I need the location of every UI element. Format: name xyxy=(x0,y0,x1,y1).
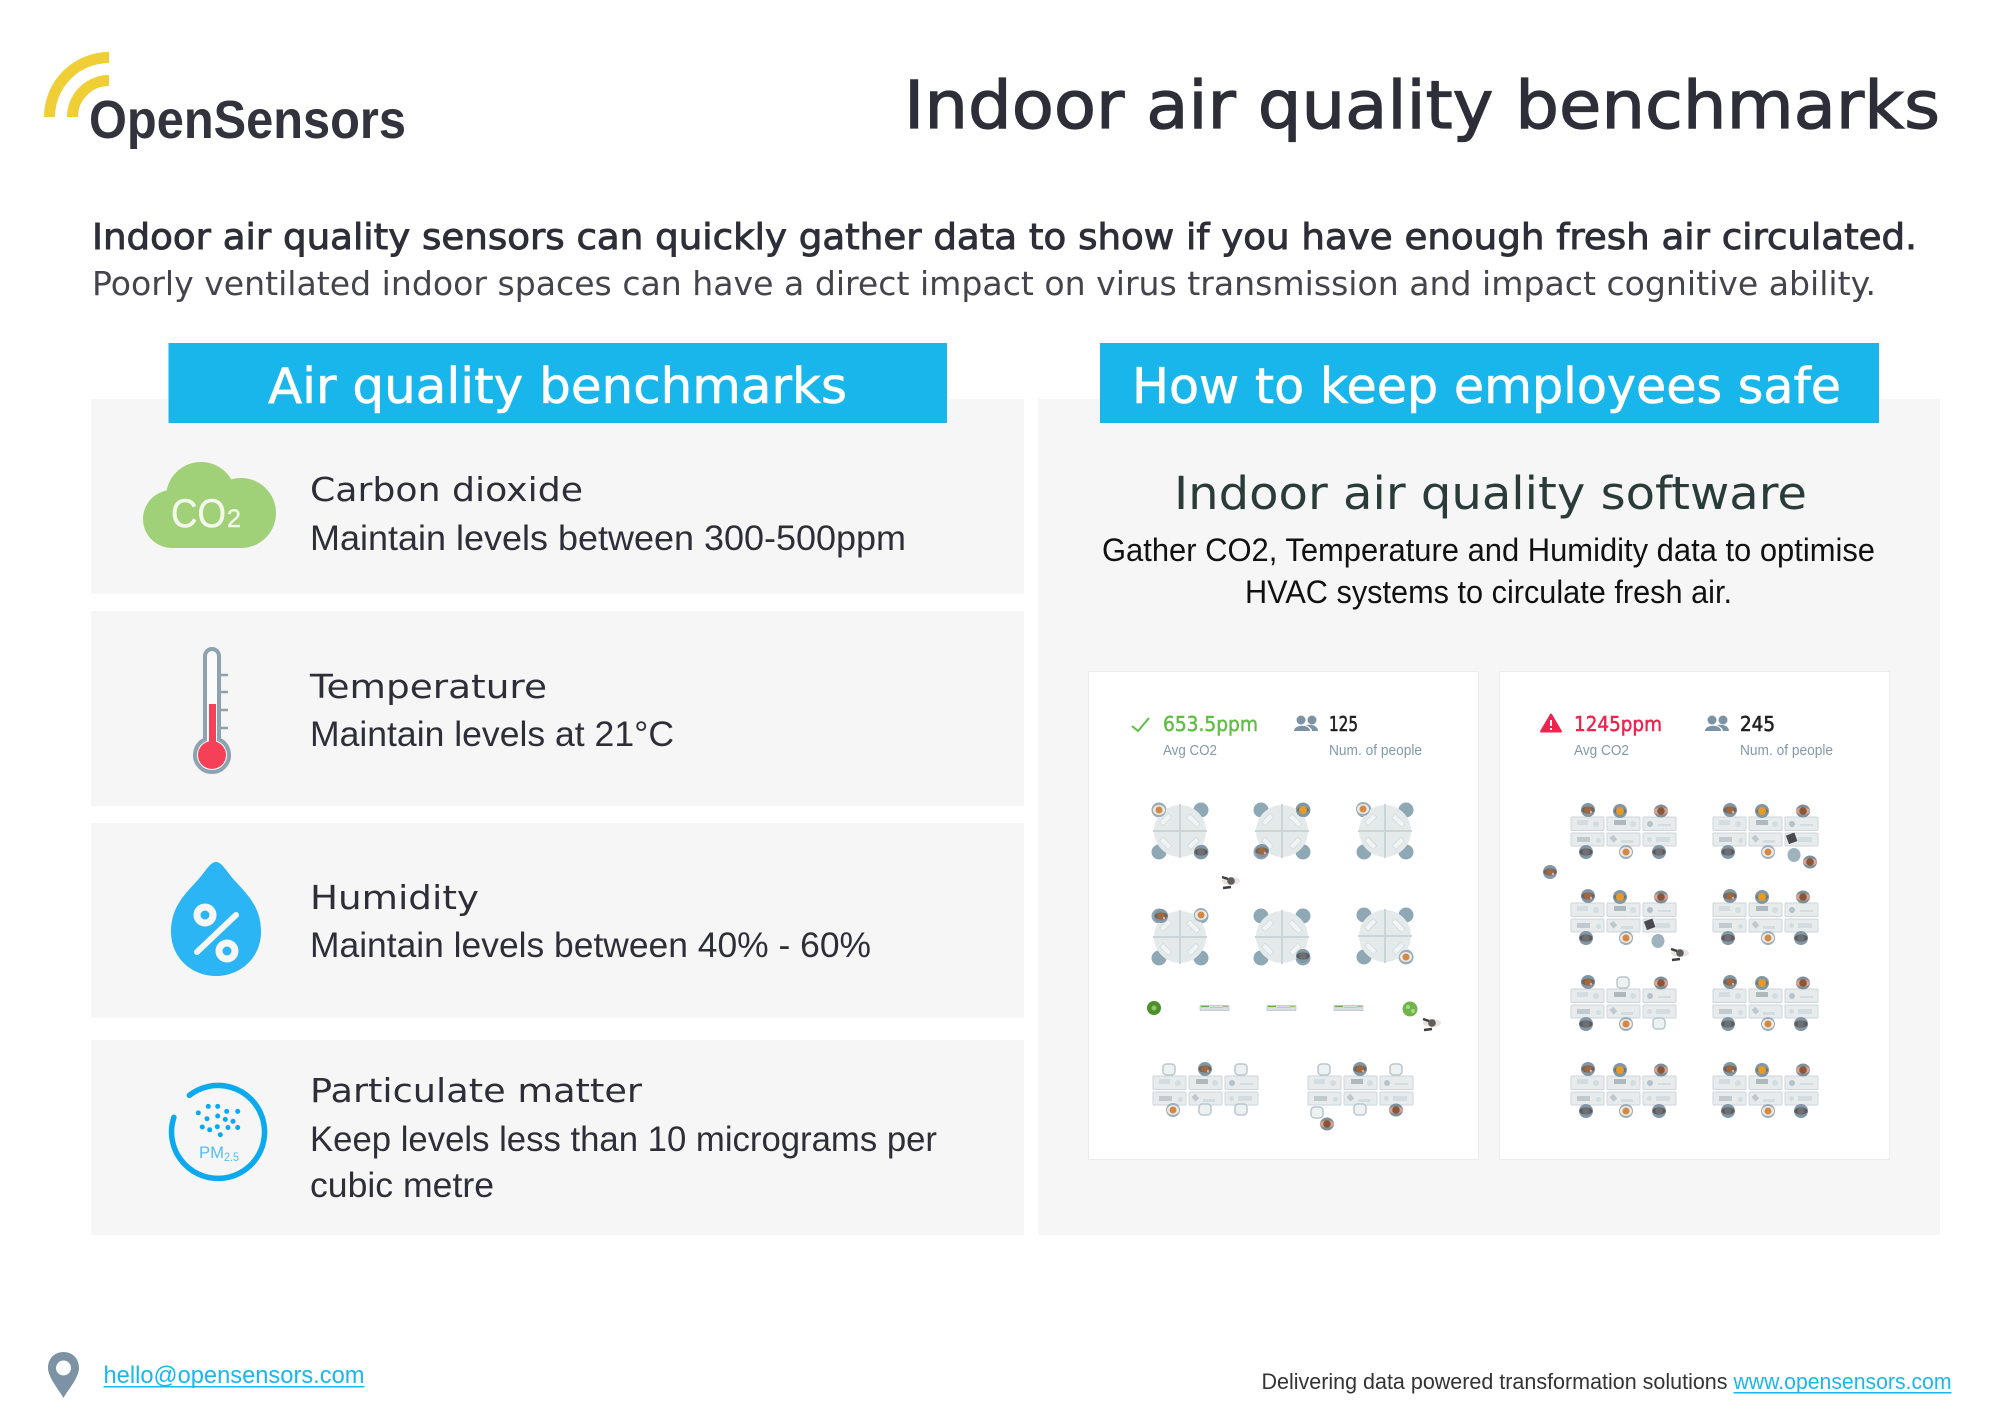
person walking xyxy=(1423,1019,1441,1030)
icon: thermometer xyxy=(195,649,229,772)
desk cluster xyxy=(1153,1062,1258,1117)
desk cluster with empty seats xyxy=(1571,975,1676,1031)
stat: average CO2 xyxy=(1574,712,1662,759)
intro text xyxy=(92,217,1917,303)
title: Indoor air quality benchmarks xyxy=(904,67,1940,144)
icon: CO2 cloud xyxy=(143,462,276,548)
heading: particulate matter: Particulate matter xyxy=(310,1071,642,1110)
text: particulate level: Keep levels less than 10 micrograms per xyxy=(310,1120,937,1159)
row panel: particulate matter xyxy=(91,1040,1024,1235)
text: software description: Gather CO2, Temperature and Humidity data to optimise xyxy=(1102,532,1875,568)
footer: tagline and website: Delivering data powered transformation solutions xyxy=(1262,1369,1728,1394)
dashboard card: good air quality xyxy=(1088,672,1478,1160)
stat: number of people: 125 xyxy=(1329,712,1358,736)
stat: number of people xyxy=(1329,712,1422,759)
header bar: how to keep employees safe: How to keep employees safe xyxy=(1132,358,1841,415)
footer: tagline and website xyxy=(1262,1369,1952,1394)
header bar: air quality benchmarks xyxy=(168,343,947,423)
icon: people xyxy=(1705,716,1729,731)
plants and storage xyxy=(1147,1001,1418,1016)
header bar: how to keep employees safe xyxy=(1100,343,1879,423)
text: temperature level: Maintain levels at 21°C xyxy=(310,715,674,754)
heading: indoor air quality software: Indoor air quality software xyxy=(1174,467,1807,520)
floor plan: sparse office xyxy=(1147,802,1441,1130)
desk cluster with laptop xyxy=(1571,889,1689,960)
desk cluster xyxy=(1308,1062,1413,1130)
icon: check mark xyxy=(1132,718,1149,731)
desk cluster with laptop xyxy=(1713,803,1818,868)
logo wordmark: OpenSensors xyxy=(89,90,406,150)
text: particulate level xyxy=(310,1120,937,1205)
text: software description: HVAC systems to circulate fresh air. xyxy=(1245,574,1732,610)
icon: humidity drop xyxy=(171,862,261,976)
stat: average CO2: 1245ppm xyxy=(1574,712,1662,736)
stat: average CO2: Avg CO2 xyxy=(1574,742,1629,759)
row panel: temperature xyxy=(91,611,1024,806)
link: website: www.opensensors.com xyxy=(1733,1369,1952,1394)
stat: number of people: Num. of people xyxy=(1329,742,1422,759)
intro bold line: Indoor air quality sensors can quickly gather data to show if you have enough fresh air circulated. xyxy=(92,217,1917,258)
footer: contact xyxy=(48,1352,364,1398)
heading: temperature: Temperature xyxy=(309,667,547,706)
stat: number of people: Num. of people xyxy=(1740,742,1833,759)
heading: humidity: Humidity xyxy=(310,878,479,917)
icon: PM2.5 xyxy=(172,1085,265,1178)
logo signal arcs xyxy=(50,58,109,117)
stat: number of people xyxy=(1740,712,1833,759)
stat: average CO2: Avg CO2 xyxy=(1163,742,1217,759)
text: software description xyxy=(1102,532,1875,610)
icon: CO2 cloud: CO xyxy=(171,492,226,536)
stat: average CO2 xyxy=(1163,712,1258,759)
icon: warning triangle xyxy=(1541,714,1561,732)
floor plan: crowded office xyxy=(1543,803,1818,1118)
panel: how to keep employees safe xyxy=(1038,343,1940,1235)
row panel: carbon dioxide xyxy=(91,399,1024,594)
header bar: air quality benchmarks: Air quality benchmarks xyxy=(268,358,847,415)
row panel: humidity xyxy=(91,823,1024,1018)
icon: PM2.5: 2.5 xyxy=(224,1150,239,1164)
icon: location pin xyxy=(48,1352,79,1398)
stat: number of people: 245 xyxy=(1740,712,1775,736)
intro regular line: Poorly ventilated indoor spaces can have a direct impact on virus transmission and impact cognitive ability. xyxy=(92,264,1876,303)
round tables xyxy=(1152,802,1414,966)
text: particulate level: cubic metre xyxy=(310,1166,494,1205)
icon: people xyxy=(1294,716,1318,731)
dashboard card: poor air quality xyxy=(1500,672,1890,1160)
heading: carbon dioxide: Carbon dioxide xyxy=(310,470,583,509)
stat: average CO2: 653.5ppm xyxy=(1163,712,1258,736)
text: humidity level: Maintain levels between 40% - 60% xyxy=(310,926,871,965)
icon: CO2 cloud: 2 xyxy=(227,505,241,533)
logo: OpenSensors xyxy=(50,58,406,150)
text: carbon dioxide level: Maintain levels between 300-500ppm xyxy=(310,519,906,558)
icon: PM2.5: PM xyxy=(199,1144,224,1162)
person walking xyxy=(1543,865,1557,879)
link: email: hello@opensensors.com xyxy=(104,1362,364,1389)
panel: air quality benchmarks xyxy=(91,343,1024,1235)
person walking xyxy=(1222,877,1240,888)
